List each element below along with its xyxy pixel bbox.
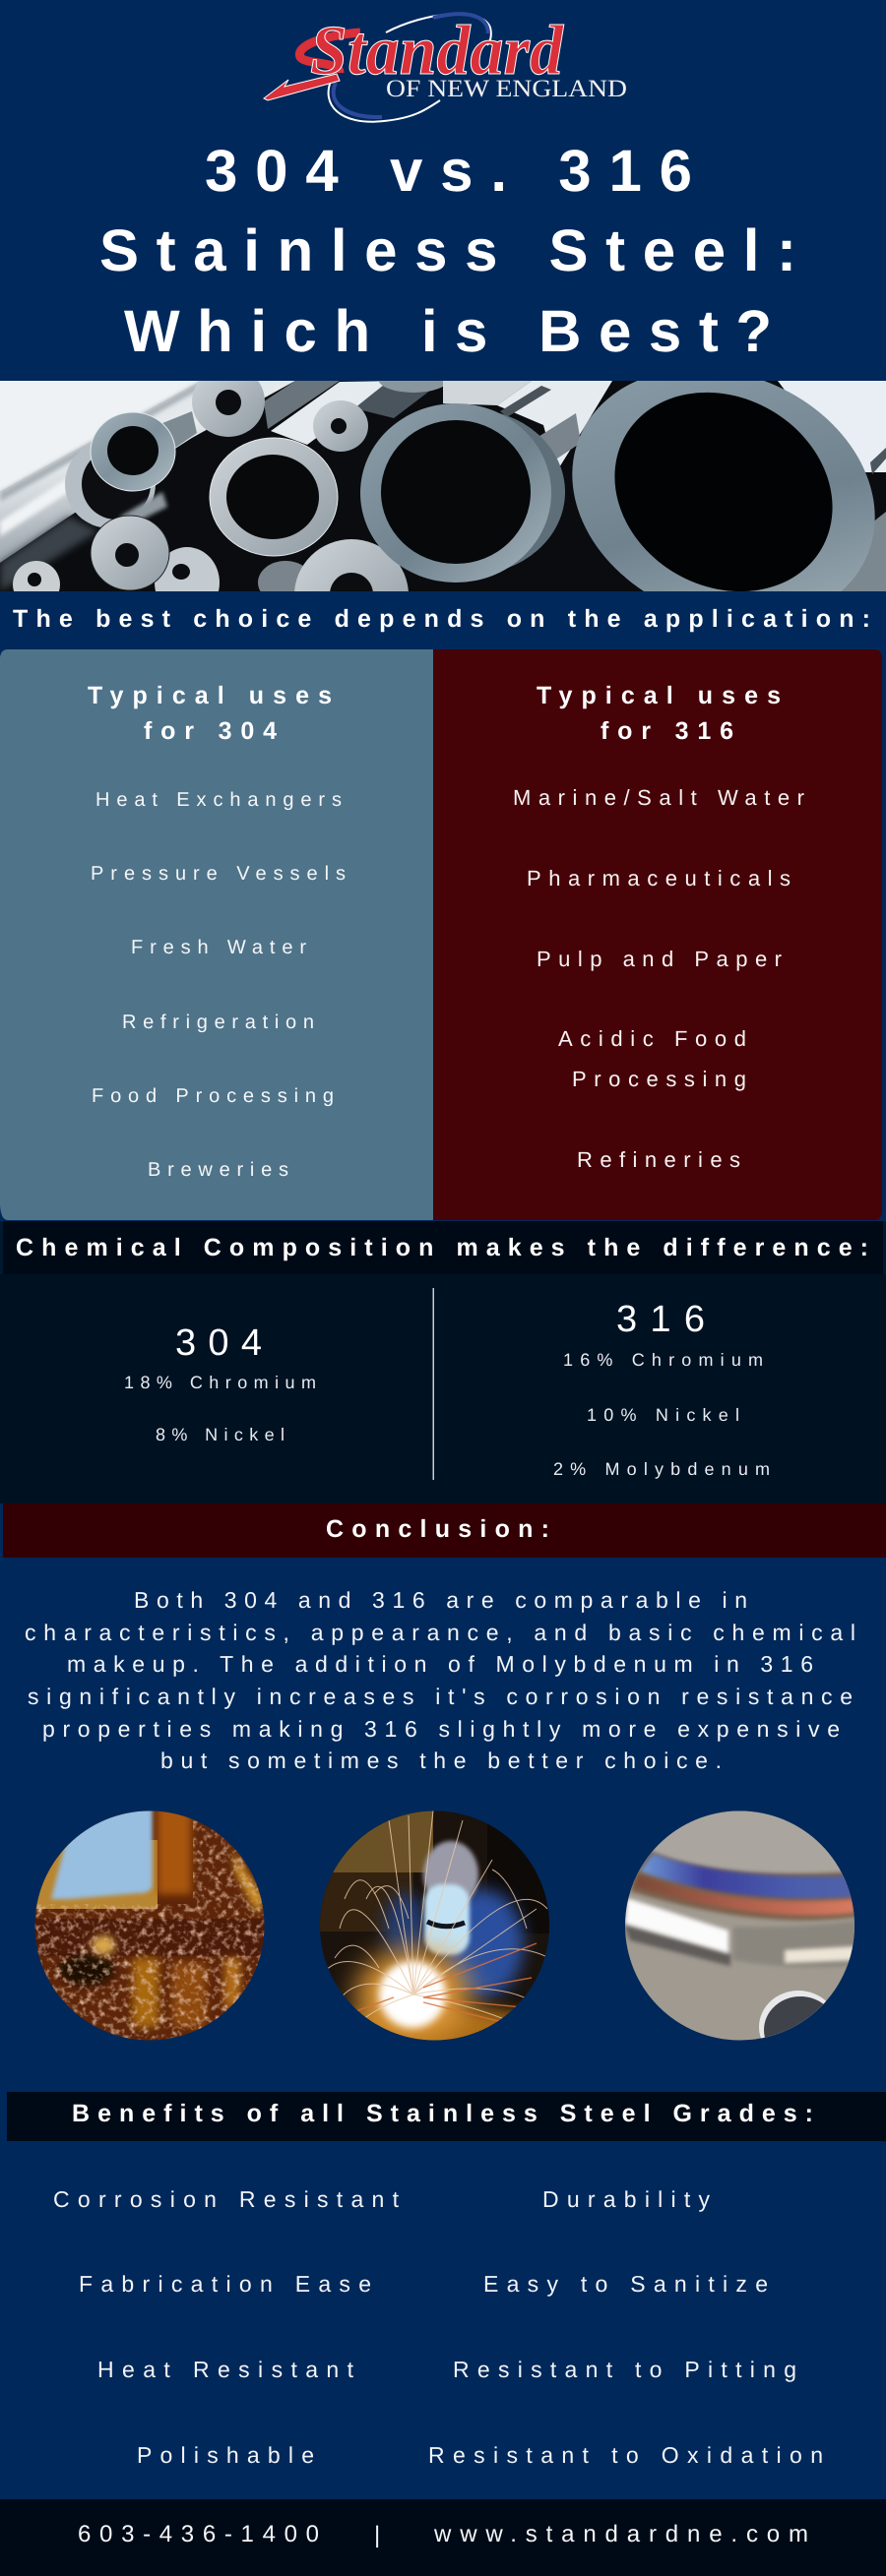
large tube xyxy=(360,403,565,583)
lower solid ring back xyxy=(155,547,220,591)
conclusion text: but sometimes the better choice. xyxy=(160,1748,722,1773)
logo: Standard of New England: OF NEW ENGLAND xyxy=(386,76,627,102)
title: Stainless Steel: xyxy=(99,217,796,283)
band: benefits heading: Benefits of all Stainless Steel Grades: xyxy=(72,2100,813,2127)
lower solid ring xyxy=(91,516,169,590)
footer: contact: 603-436-1400 xyxy=(78,2521,319,2547)
composition 316: 16% Chromium xyxy=(563,1350,763,1370)
list 316: Acidic Food xyxy=(558,1026,746,1051)
tube stub under mid ring xyxy=(258,561,303,591)
logo: Standard of New England: Standard xyxy=(310,11,564,90)
list 304: Heat Exchangers xyxy=(95,789,342,811)
heading 304: for 304 xyxy=(144,717,277,745)
benefits list: Polishable xyxy=(137,2442,314,2468)
photo: welder xyxy=(320,1810,549,2041)
band: conclusion heading: Conclusion: xyxy=(326,1515,549,1543)
heading 316: for 316 xyxy=(601,717,733,745)
heading 316 xyxy=(537,682,781,745)
list 304 xyxy=(91,789,346,1181)
bottom ring xyxy=(294,539,409,591)
benefits list: Durability xyxy=(542,2186,711,2212)
logo: Standard of New England xyxy=(264,11,627,122)
benefits list: Corrosion Resistant xyxy=(53,2186,400,2212)
band: benefits heading xyxy=(7,2092,886,2141)
heading 304: Typical uses xyxy=(88,682,332,709)
heading 304 xyxy=(88,682,332,745)
footer: contact: www.standardne.com xyxy=(433,2521,808,2547)
echo tube behind left ring xyxy=(65,440,156,528)
small solid ring top xyxy=(192,381,265,437)
title: Which is Best? xyxy=(124,298,772,364)
composition 316: 316 xyxy=(616,1299,705,1340)
title: 304 vs. 316 xyxy=(205,138,692,204)
bottom-left ring xyxy=(13,561,60,591)
list 304: Breweries xyxy=(148,1159,288,1181)
heading 316: Typical uses xyxy=(537,682,781,709)
title xyxy=(99,138,796,364)
list 304: Fresh Water xyxy=(131,937,306,958)
composition 304: 304 xyxy=(175,1322,262,1364)
list 304: Pressure Vessels xyxy=(91,863,346,885)
composition 304: 8% Nickel xyxy=(156,1425,285,1444)
composition 316 xyxy=(553,1299,770,1479)
benefits list: Resistant to Pitting xyxy=(453,2357,796,2382)
mid tube xyxy=(210,438,338,556)
list 304: Food Processing xyxy=(92,1085,334,1107)
band: chemical composition heading xyxy=(0,1221,886,1274)
benefits list: Fabrication Ease xyxy=(79,2271,371,2297)
footer: contact: | xyxy=(374,2522,380,2548)
photo: rust xyxy=(30,1806,271,2047)
benefits list: Resistant to Oxidation xyxy=(428,2442,823,2468)
band: conclusion heading xyxy=(3,1503,886,1558)
band: chemical composition heading: Chemical Composition makes the difference: xyxy=(16,1234,868,1261)
small solid ring xyxy=(313,400,368,452)
composition 304 xyxy=(124,1322,316,1444)
benefits list xyxy=(53,2186,823,2468)
conclusion text: properties making 316 slightly more expensive xyxy=(42,1716,840,1742)
list 316 xyxy=(513,785,804,1172)
composition 304: 18% Chromium xyxy=(124,1373,316,1392)
benefits list: Heat Resistant xyxy=(97,2357,354,2382)
left tube xyxy=(91,412,175,491)
conclusion text: Both 304 and 316 are comparable in xyxy=(134,1587,747,1613)
panel: typical uses for 316 xyxy=(433,649,882,1220)
photo: stainless steel pipes xyxy=(0,381,886,591)
largest tube xyxy=(572,381,875,591)
list 316: Marine/Salt Water xyxy=(513,785,804,810)
list 316: Processing xyxy=(572,1067,746,1091)
conclusion text: significantly increases it's corrosion resistance xyxy=(28,1684,853,1709)
tube highlight behind top ring xyxy=(162,411,197,448)
list 316: Refineries xyxy=(577,1147,740,1172)
benefits list: Easy to Sanitize xyxy=(483,2271,768,2297)
list 316: Pulp and Paper xyxy=(537,947,782,971)
conclusion text xyxy=(25,1587,855,1773)
composition 316: 10% Nickel xyxy=(587,1405,739,1425)
panel: chemical composition xyxy=(0,1274,886,1503)
panel: typical uses for 304 xyxy=(0,649,433,1220)
band: best choice heading xyxy=(0,591,886,649)
photo: stainless weld xyxy=(625,1810,854,2041)
footer: contact xyxy=(0,2499,886,2576)
composition 316: 2% Molybdenum xyxy=(553,1459,770,1479)
list 304: Refrigeration xyxy=(122,1012,314,1033)
conclusion text: makeup. The addition of Molybdenum in 316 xyxy=(67,1651,813,1677)
band: best choice heading: The best choice depends on the application: xyxy=(13,605,870,633)
conclusion text: characteristics, appearance, and basic chemical xyxy=(25,1620,855,1645)
list 316: Pharmaceuticals xyxy=(527,866,791,890)
